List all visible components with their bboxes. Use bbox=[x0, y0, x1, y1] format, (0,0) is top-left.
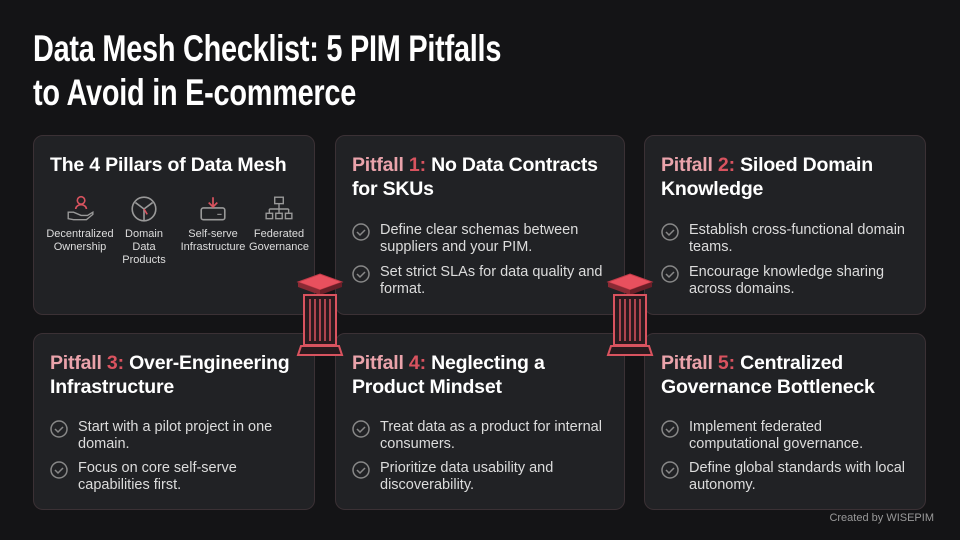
heading: pitfall 4: Pitfall 4: Neglecting a bbox=[352, 352, 545, 374]
pillar: self-serve infrastructure: Infrastructure bbox=[181, 241, 245, 253]
title: Data Mesh Checklist: 5 PIM Pitfalls bbox=[33, 28, 501, 69]
footer credit: Created by WISEPIM bbox=[829, 512, 934, 524]
bullet: Define global standards with local autonomy. bbox=[689, 460, 905, 493]
heading: pitfall 3 bbox=[50, 352, 290, 398]
bullet: Establish cross-functional domain teams. bbox=[689, 222, 905, 255]
bullet: Focus on core self-serve capabilities first. bbox=[78, 460, 237, 493]
heading: pitfall 5 bbox=[661, 352, 875, 398]
bullet: Treat data as a product for internal consumers. bbox=[380, 419, 602, 452]
heading: pillars: The 4 Pillars of Data Mesh bbox=[50, 154, 286, 176]
pillar: federated governance: Governance bbox=[249, 241, 309, 253]
heading: pitfall 4 bbox=[352, 352, 545, 398]
pillar: federated governance bbox=[249, 196, 309, 253]
icon: pillar left bbox=[296, 274, 344, 356]
bullet: Set strict SLAs for data quality and format. bbox=[380, 264, 602, 297]
heading: pitfall 2: Knowledge bbox=[661, 178, 763, 200]
heading: pitfall 2: Pitfall 2: Siloed Domain bbox=[661, 154, 873, 176]
heading: pitfall 2 bbox=[661, 154, 873, 200]
panel: pitfall 5 bbox=[644, 333, 926, 510]
bullet: Define clear schemas between suppliers and your PIM. bbox=[380, 222, 578, 255]
pillar: domain data products: Products bbox=[122, 254, 166, 266]
pillar: decentralized ownership: Decentralized bbox=[46, 228, 114, 240]
pillar: self-serve infrastructure bbox=[181, 197, 245, 253]
heading: pitfall 1 bbox=[352, 154, 598, 200]
icon: pillar right bbox=[606, 274, 654, 356]
heading: pitfall 1: for SKUs bbox=[352, 178, 434, 200]
bullet: Encourage knowledge sharing across domains. bbox=[689, 264, 884, 297]
panel: pitfall 3 bbox=[33, 333, 315, 510]
pillar: decentralized ownership bbox=[46, 196, 114, 253]
pillar: domain data products bbox=[122, 196, 166, 266]
pillar: self-serve infrastructure: Self-serve bbox=[188, 228, 238, 240]
heading: pitfall 5: Governance Bottleneck bbox=[661, 376, 875, 398]
panel: 4 pillars bbox=[33, 135, 315, 315]
panel: pitfall 1 bbox=[335, 135, 625, 315]
bullet: Start with a pilot project in one domain. bbox=[78, 419, 272, 452]
pillar: decentralized ownership: Ownership bbox=[54, 241, 106, 253]
panel: pitfall 4 bbox=[335, 333, 625, 510]
pillar: federated governance: Federated bbox=[254, 228, 304, 240]
title: to Avoid in E-commerce bbox=[33, 72, 356, 113]
bullet: Prioritize data usability and discoverability. bbox=[380, 460, 553, 493]
panel: pitfall 2 bbox=[644, 135, 926, 315]
heading: pitfall 4: Product Mindset bbox=[352, 376, 502, 398]
pillar: domain data products: Domain bbox=[125, 228, 163, 240]
pillar: domain data products: Data bbox=[132, 241, 156, 253]
heading: pitfall 1: Pitfall 1: No Data Contracts bbox=[352, 154, 598, 176]
heading: pitfall 3: Infrastructure bbox=[50, 376, 174, 398]
heading: pitfall 3: Pitfall 3: Over-Engineering bbox=[50, 352, 290, 374]
heading: pitfall 5: Pitfall 5: Centralized bbox=[661, 352, 843, 374]
bullet: Implement federated computational governance. bbox=[689, 419, 863, 452]
title bbox=[33, 28, 501, 113]
